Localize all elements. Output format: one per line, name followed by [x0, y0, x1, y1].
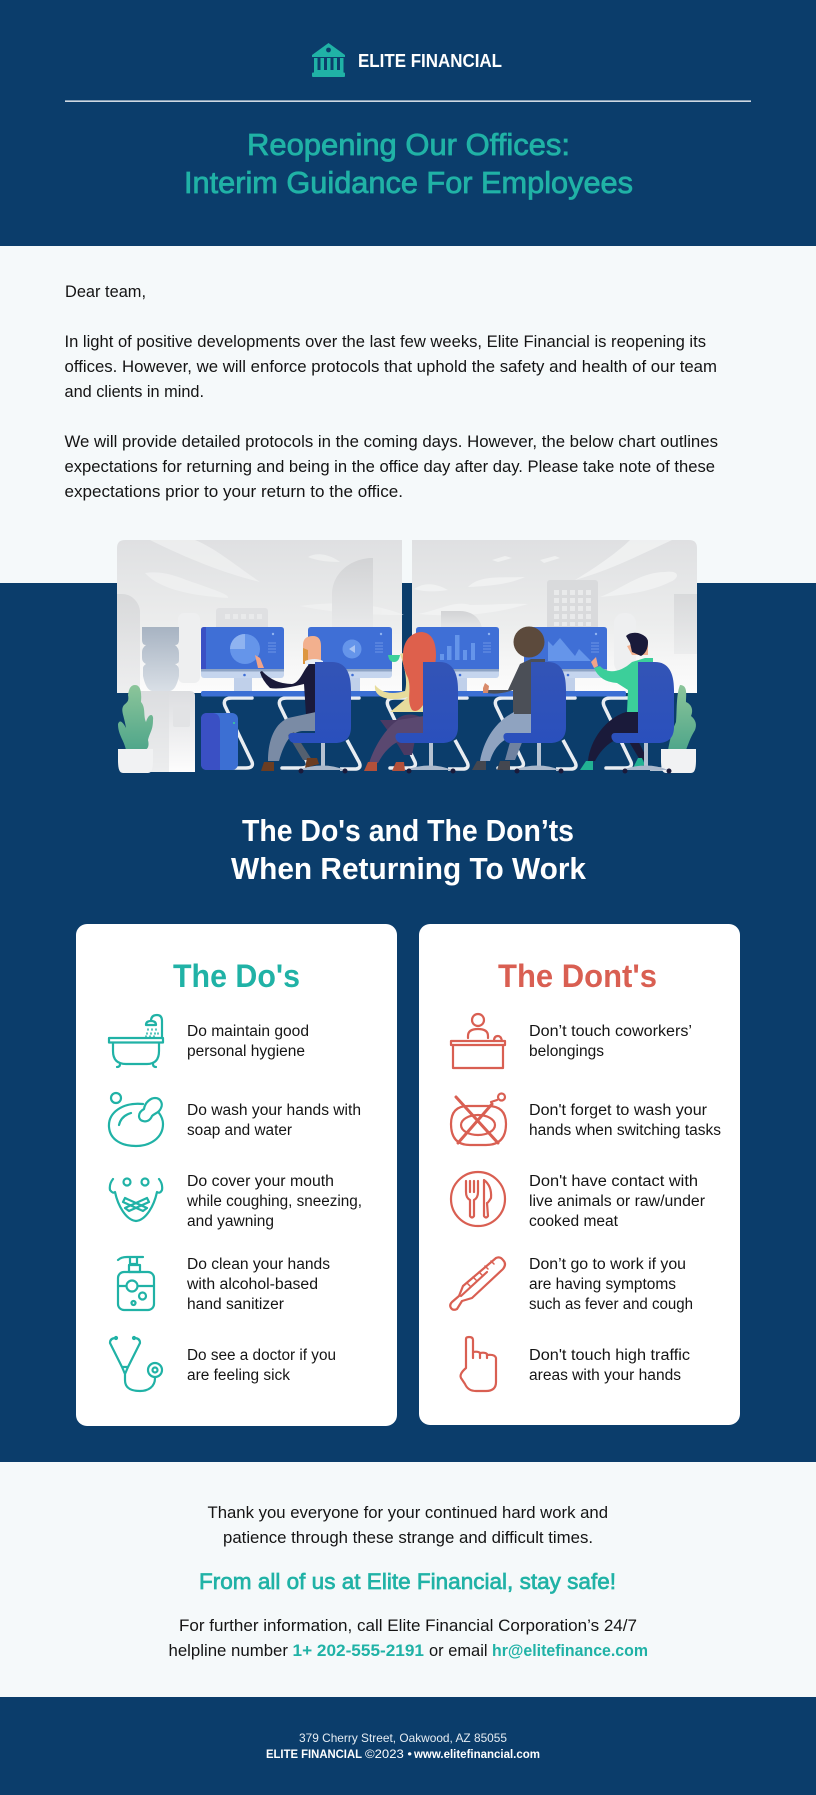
intro letter text: expectations prior to your return to the office.: [64, 483, 403, 501]
item: symptoms: [450, 1256, 693, 1313]
text: [529, 1173, 705, 1230]
brand name: ELITE FINANCIAL: [358, 51, 502, 71]
text: [187, 1023, 309, 1060]
text: Don’t touch coworkers’: [529, 1023, 692, 1040]
worker 4: [580, 633, 660, 770]
chair 2: [395, 662, 468, 774]
section heading: The Do's and The Don’ts: [242, 813, 574, 848]
icon: no soap: [451, 1094, 506, 1145]
item: belongings: [451, 1014, 692, 1068]
item: high traffic areas: [461, 1337, 690, 1391]
copyright line: ©2023 •: [365, 1747, 412, 1761]
text: [186, 1173, 362, 1230]
text: and yawning: [187, 1213, 274, 1230]
worker 3: [472, 626, 545, 770]
water cooler: [133, 627, 195, 772]
worker 1: [255, 636, 330, 771]
icon: stethoscope: [110, 1337, 162, 1391]
contact text: helpline number: [168, 1642, 289, 1660]
pot left: [118, 749, 153, 773]
monitor 2 play chart: [308, 627, 392, 691]
heading: the do's: The Do's: [173, 958, 300, 994]
closing section: [0, 1462, 816, 1697]
contact text: For further information, call Elite Financial Corporation’s 24/7: [179, 1617, 637, 1635]
office window right: [412, 540, 697, 693]
item: sanitizer: [118, 1256, 330, 1313]
thank you text: patience through these strange and difficult times.: [223, 1529, 593, 1547]
text: belongings: [529, 1043, 604, 1060]
text: Do maintain good: [187, 1023, 309, 1040]
contact text: or email: [429, 1642, 488, 1660]
monitor 1 pie chart: [201, 627, 284, 691]
text: such as fever and cough: [529, 1296, 693, 1313]
copyright line: www.elitefinancial.com: [413, 1747, 540, 1761]
text: are having symptoms: [529, 1276, 676, 1293]
desk top: [201, 691, 626, 696]
office window left: [117, 540, 404, 693]
intro letter text: [64, 283, 718, 501]
text: Do clean your hands: [187, 1256, 330, 1273]
text: cooked meat: [529, 1213, 619, 1230]
building: office tower: [547, 580, 598, 640]
building: tower: [332, 558, 373, 627]
item: animals and meat: [451, 1172, 705, 1230]
chair 4: [611, 662, 674, 774]
desk frames: [224, 698, 640, 768]
item: hygiene: [109, 1015, 309, 1067]
intro letter text: offices. However, we will enforce protocols that uphold the safety and health of our team: [64, 358, 717, 376]
text: soap and water: [187, 1122, 292, 1139]
panel: the don'ts: [419, 924, 740, 1425]
computer tower: [201, 713, 238, 770]
plant right: [668, 685, 696, 750]
text: Don’t go to work if you: [529, 1256, 686, 1273]
intro letter text: and clients in mind.: [64, 383, 204, 401]
icon: soap: [109, 1093, 163, 1146]
pot right: [661, 749, 696, 773]
thank you text: Thank you everyone for your continued hard work and: [208, 1504, 608, 1522]
panel: the do's: [76, 924, 397, 1426]
contact text: 1+ 202-555-2191: [292, 1642, 424, 1660]
title: [184, 127, 633, 200]
contact text: hr@elitefinance.com: [492, 1642, 648, 1660]
plant left: [118, 685, 153, 750]
footer: [0, 1697, 816, 1795]
header rule: [65, 100, 751, 102]
monitor 3 bar chart: [416, 627, 499, 691]
icon: fork and knife: [451, 1172, 505, 1226]
text: [187, 1102, 361, 1139]
text: [529, 1347, 690, 1384]
item: switching tasks: [451, 1094, 721, 1145]
text: are feeling sick: [187, 1367, 290, 1384]
text: while coughing, sneezing,: [186, 1193, 362, 1210]
text: Do see a doctor if you: [187, 1347, 336, 1364]
item: wash hands: [109, 1093, 361, 1146]
icon: person at desk: [451, 1014, 505, 1068]
icon: bank logo: [312, 43, 345, 77]
text: personal hygiene: [187, 1043, 305, 1060]
title: Interim Guidance For Employees: [184, 165, 633, 200]
text: hand sanitizer: [187, 1296, 284, 1313]
building: windows block: [216, 608, 268, 638]
icon: thermometer: [450, 1257, 505, 1310]
text: areas with your hands: [529, 1367, 681, 1384]
contact text: [168, 1617, 648, 1660]
text: Don't touch high traffic: [529, 1347, 690, 1364]
item: doctor: [110, 1337, 336, 1391]
header band: [0, 0, 816, 246]
icon: bathtub: [109, 1015, 163, 1067]
monitor 4 area chart: [524, 627, 607, 691]
intro letter text: expectations for returning and being in the office day after day. Please take note of these: [64, 458, 715, 476]
stay safe callout: From all of us at Elite Financial, stay safe!: [199, 1569, 616, 1594]
section heading: [231, 813, 587, 886]
copyright line: ELITE FINANCIAL: [266, 1747, 362, 1761]
intro section background: [0, 246, 816, 583]
icon: sanitizer bottle: [118, 1257, 154, 1310]
copyright line: [266, 1747, 540, 1761]
text: Do cover your mouth: [187, 1173, 334, 1190]
address: 379 Cherry Street, Oakwood, AZ 85055: [299, 1731, 507, 1745]
text: [529, 1102, 721, 1139]
icon: pointing hand: [461, 1337, 496, 1391]
text: [529, 1023, 692, 1060]
section heading: When Returning To Work: [231, 851, 587, 886]
text: hands when switching tasks: [529, 1122, 721, 1139]
text: [529, 1256, 693, 1313]
illustration: office workers at desks: [117, 540, 697, 774]
intro letter text: In light of positive developments over the last few weeks, Elite Financial is reopening its: [64, 333, 706, 351]
item: cover mouth: [110, 1173, 362, 1230]
text: [186, 1256, 330, 1313]
text: Don't forget to wash your: [529, 1102, 707, 1119]
text: Don't have contact with: [529, 1173, 698, 1190]
chair 1: [288, 662, 360, 774]
title: Reopening Our Offices:: [247, 127, 570, 162]
chair 3: [503, 662, 576, 774]
worker 2: [364, 632, 436, 771]
intro letter text: We will provide detailed protocols in the coming days. However, the below chart outlines: [64, 433, 718, 451]
text: Do wash your hands with: [187, 1102, 361, 1119]
text: live animals or raw/under: [529, 1193, 705, 1210]
intro letter text: Dear team,: [65, 283, 146, 301]
thank you text: [208, 1504, 608, 1547]
icon: covered mouth: [110, 1178, 162, 1221]
heading: the don'ts: The Dont's: [498, 958, 657, 994]
text: with alcohol-based: [186, 1276, 318, 1293]
text: [187, 1347, 336, 1384]
